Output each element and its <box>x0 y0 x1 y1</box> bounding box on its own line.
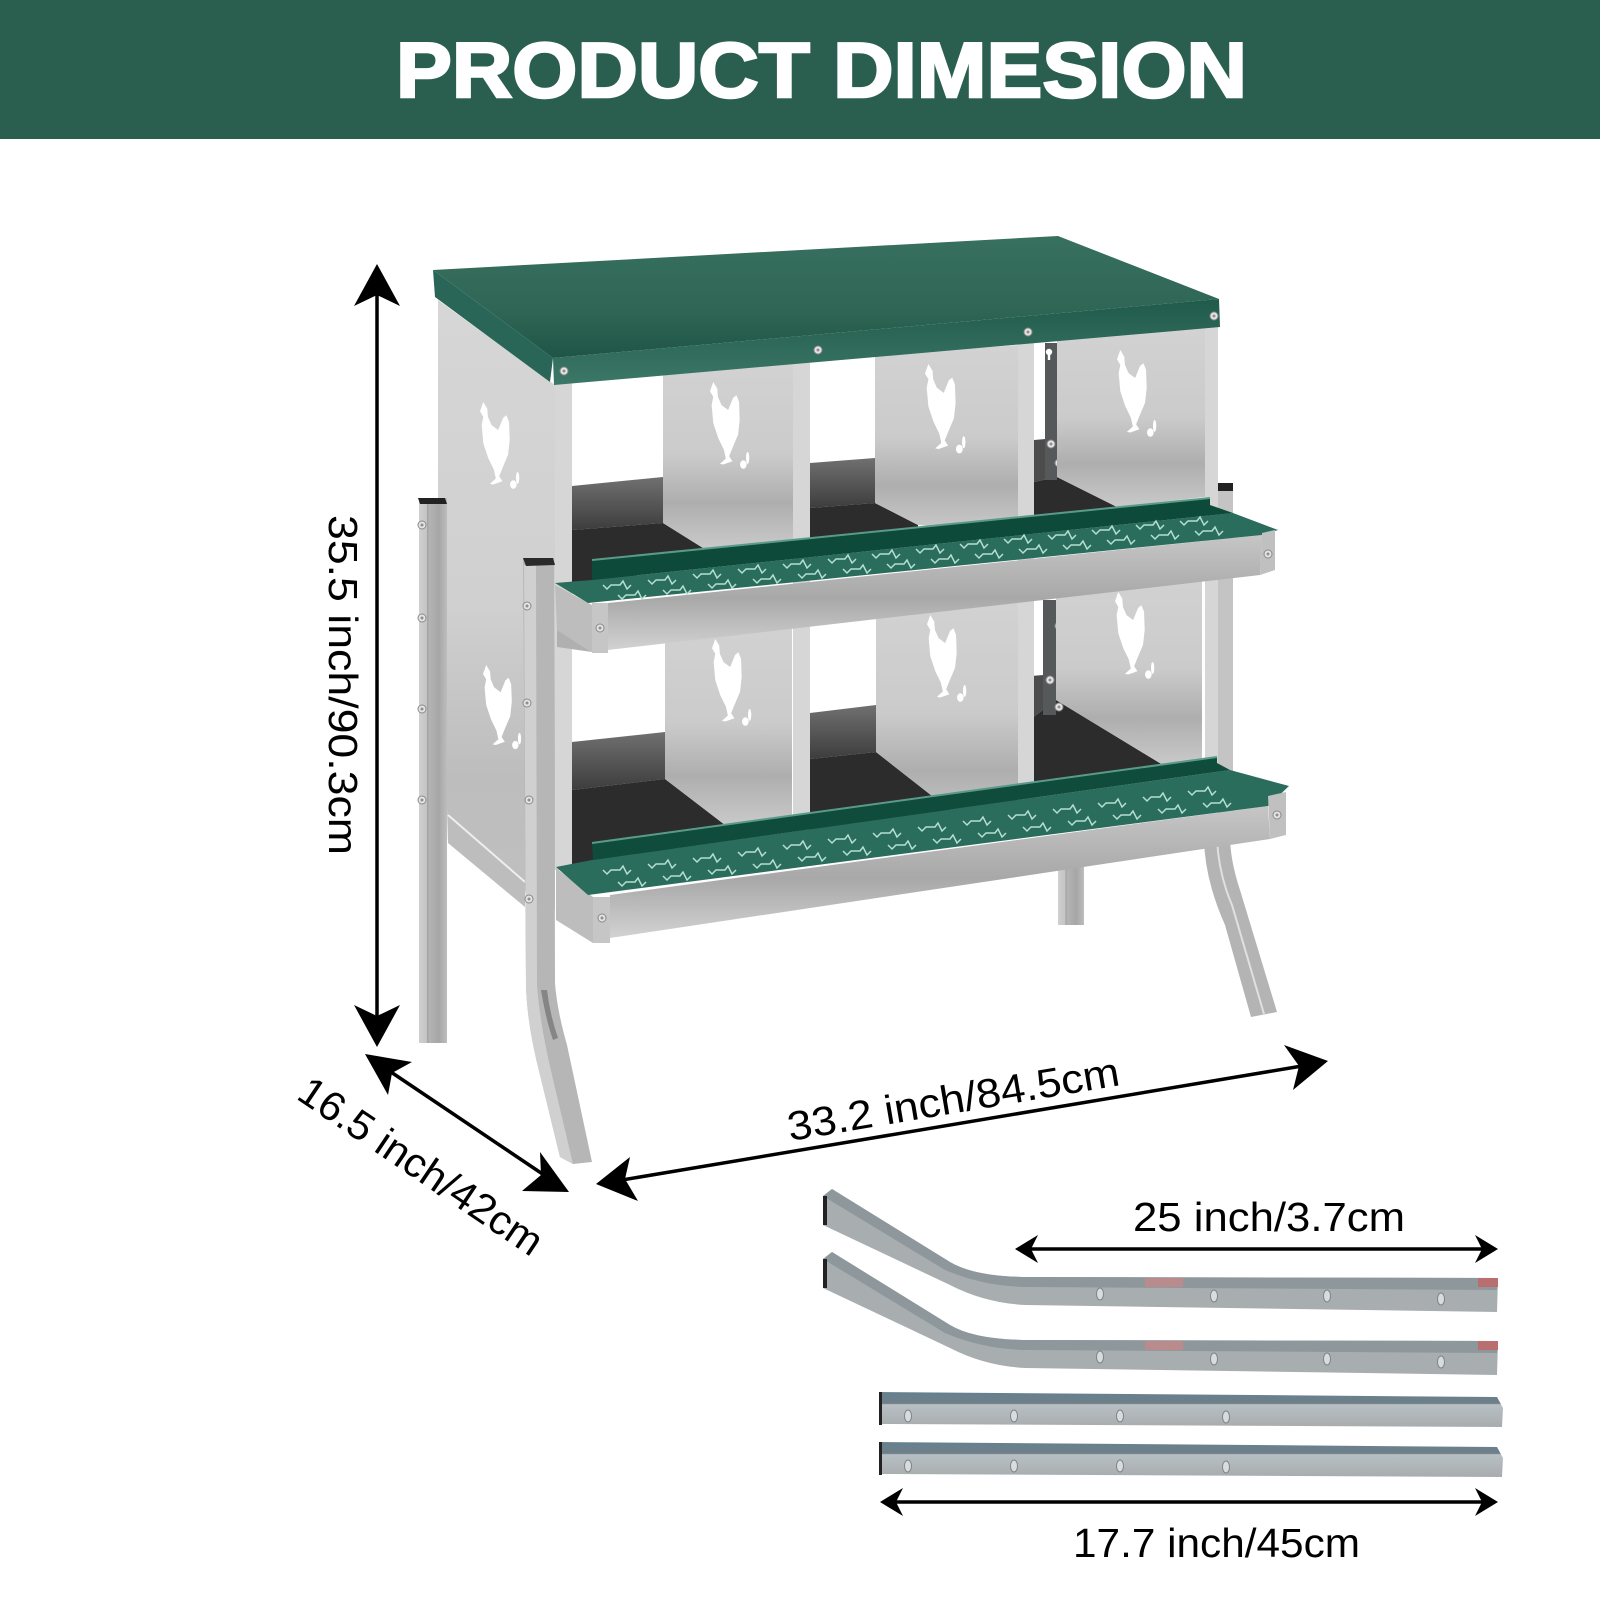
bent leg dimension <box>1015 1194 1498 1263</box>
bent leg label: 25 inch/3.7cm <box>1133 1194 1405 1240</box>
height dimension <box>320 264 400 1047</box>
header banner <box>0 0 1600 139</box>
side panel <box>438 300 555 910</box>
nesting compartments lower <box>572 570 1202 875</box>
straight leg parts <box>879 1392 1503 1477</box>
straight leg 1 <box>879 1392 1503 1427</box>
bent leg parts <box>823 1189 1498 1375</box>
lower perch tray <box>556 757 1289 943</box>
depth dimension <box>290 1054 569 1265</box>
title: PRODUCT DIMESION <box>396 26 1247 114</box>
front legs <box>418 498 592 1164</box>
width dimension <box>596 1045 1328 1201</box>
rear legs <box>1058 483 1277 1017</box>
upper perch tray <box>555 498 1278 653</box>
bent leg 2 <box>823 1252 1498 1375</box>
straight leg dimension <box>880 1488 1498 1566</box>
uprights <box>555 325 1218 870</box>
straight leg 2 <box>879 1442 1503 1477</box>
bent leg 1 <box>823 1189 1498 1312</box>
nesting box product illustration <box>418 236 1289 1164</box>
roof <box>433 236 1220 385</box>
height label: 35.5 inch/90.3cm <box>320 515 366 855</box>
straight leg label: 17.7 inch/45cm <box>1073 1520 1360 1566</box>
nesting compartments upper <box>572 328 1205 590</box>
depth label: 16.5 inch/42cm <box>290 1067 552 1265</box>
width label: 33.2 inch/84.5cm <box>784 1048 1123 1150</box>
